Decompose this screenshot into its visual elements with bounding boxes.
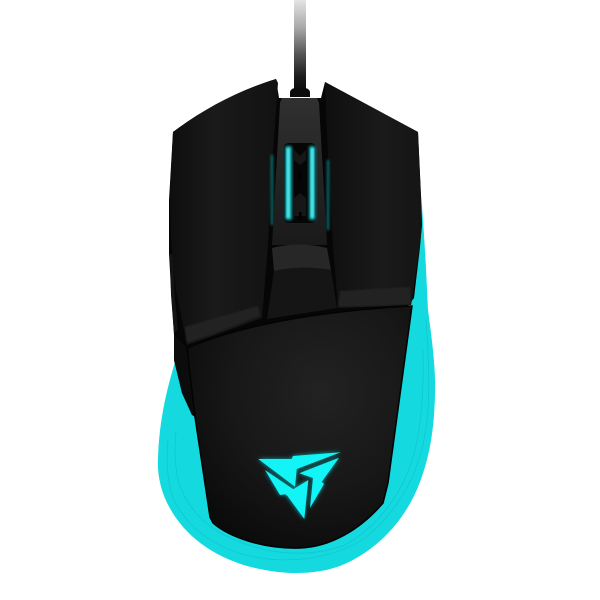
- left main button: [170, 79, 278, 345]
- center scroll strip: [272, 98, 327, 245]
- teal body shell: [158, 195, 435, 573]
- scroll wheel: [284, 143, 316, 223]
- DPI button: [267, 244, 337, 319]
- upper black body: [169, 79, 422, 415]
- palm rest: [187, 306, 412, 548]
- wheel light glow: [285, 146, 316, 220]
- side buttons: [170, 253, 195, 417]
- right main button: [325, 82, 421, 308]
- logo glow: [258, 452, 341, 519]
- logo: [258, 452, 341, 519]
- cable: [290, 0, 310, 97]
- body contour lines: [167, 320, 429, 560]
- side lighting beside strip: [271, 155, 329, 230]
